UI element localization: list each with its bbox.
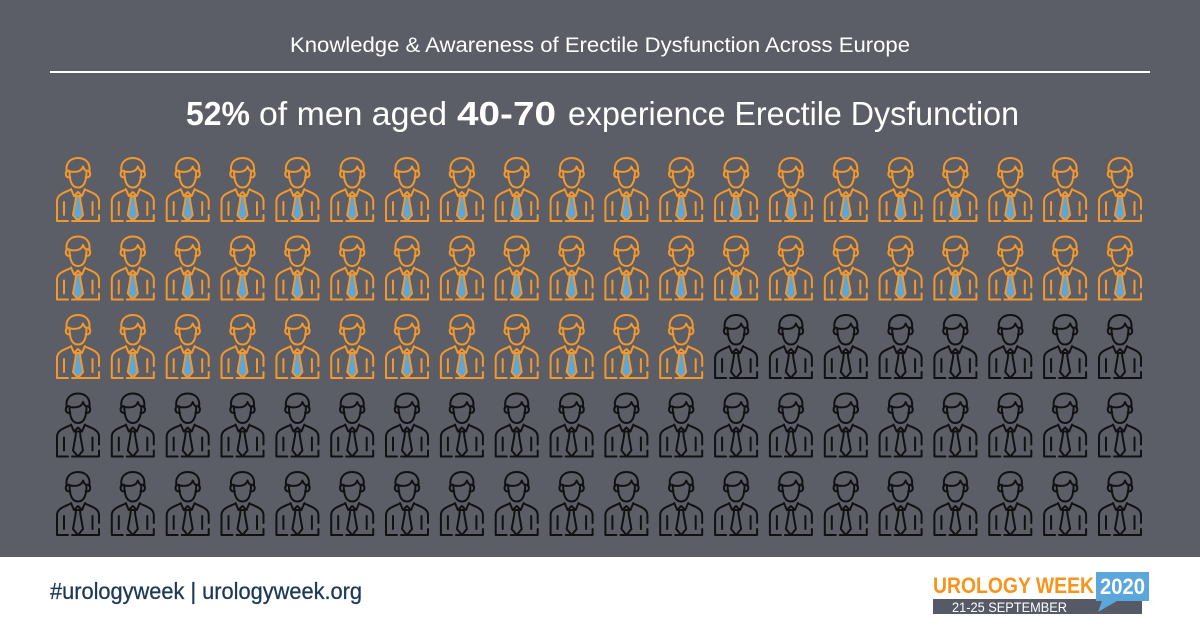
footer hashtag and website: #urologyweek | urologyweek.org [50,578,362,604]
pictogram row 2: 20 affected men [57,236,1141,300]
headline statistic: 52% [186,95,250,132]
logo: Urology Week 2020: UROLOGY WEEK [933,573,1094,598]
headline statistic: 40-70 [457,95,556,132]
headline statistic: experience Erectile Dysfunction [568,95,1019,132]
headline statistic: of men aged [259,95,447,132]
footer band [0,557,1200,630]
pictogram row 3: 12 affected and 8 unaffected men [57,315,1141,378]
heading: report title: Knowledge & Awareness of Erectile Dysfunction Across Europe [290,33,910,57]
pictogram row 4: 20 unaffected men [57,394,1141,456]
pictogram row 1: 20 affected men [57,158,1141,221]
logo: Urology Week 2020: 2020 [1100,574,1145,599]
headline statistic [186,95,1019,132]
logo: Urology Week 2020 [933,572,1149,615]
pictogram row 5: 20 unaffected men [57,472,1141,535]
logo: Urology Week 2020: 21-25 SEPTEMBER [952,600,1067,615]
